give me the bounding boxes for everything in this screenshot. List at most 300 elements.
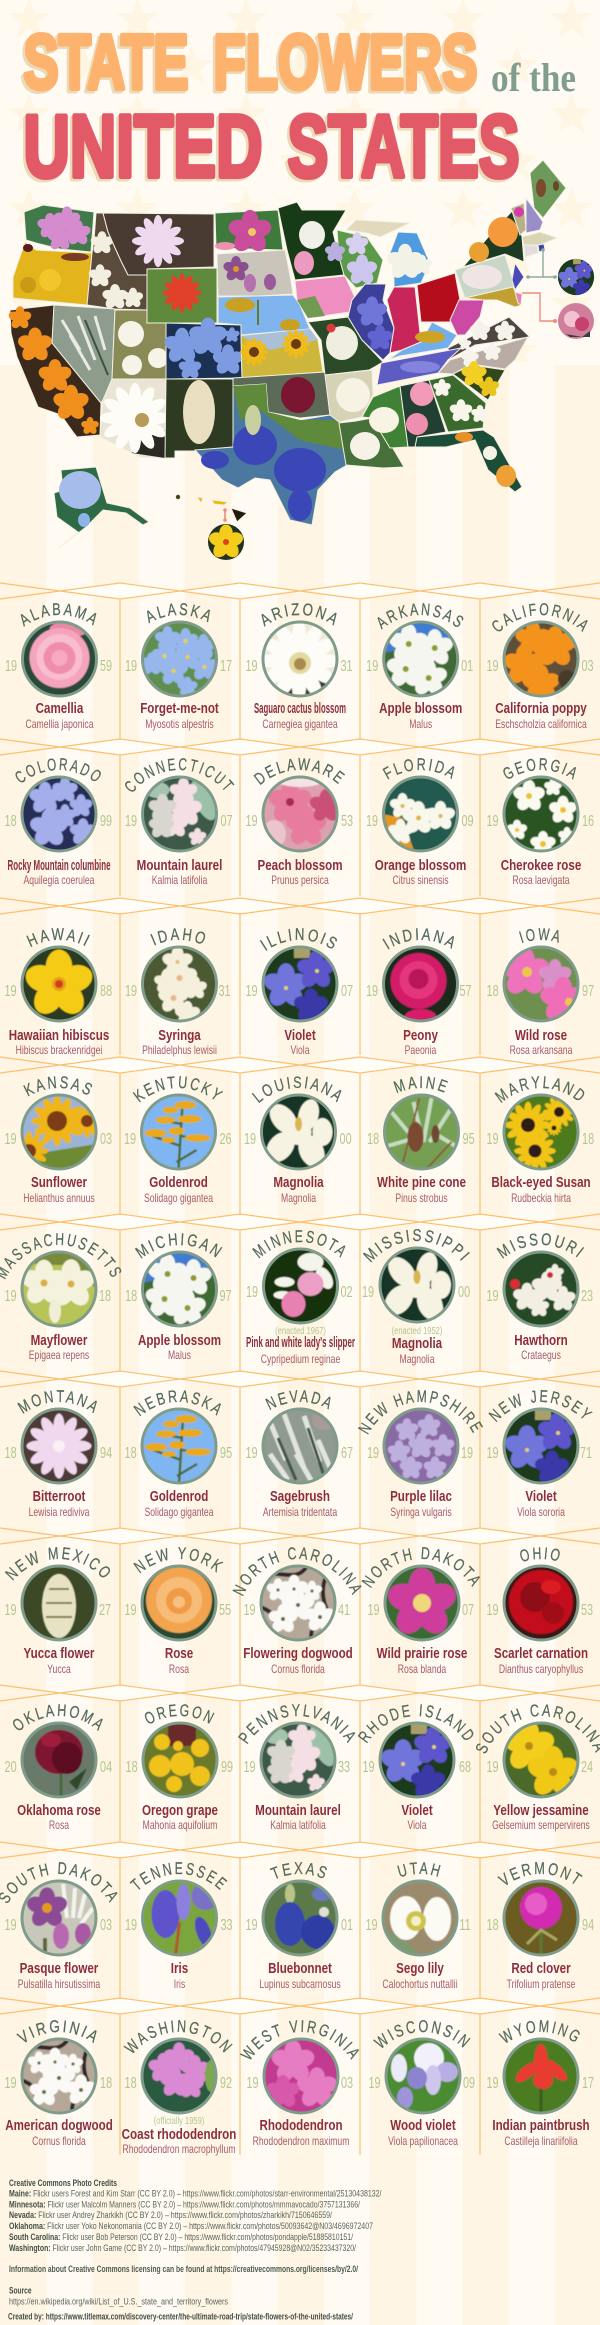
state name: COLORADO [16, 758, 101, 782]
scientific name: Viola [407, 1820, 427, 1832]
state: Florida [415, 430, 522, 492]
flower photo [503, 2038, 579, 2114]
flower name: Rhododendron [259, 2117, 343, 2133]
flower photo [262, 1408, 338, 1484]
years [486, 1444, 592, 1462]
flower photo [501, 1720, 581, 1799]
title shadow: UNITED [21, 99, 260, 198]
title line 1: STATE [24, 20, 188, 106]
years: 19 [366, 657, 378, 675]
scientific name: Solidago gigantea [144, 1507, 214, 1519]
callout: Hawaii [207, 508, 245, 560]
state name: NORTH CAROLINA [232, 1547, 362, 1596]
years: 18 [5, 1444, 17, 1462]
scientific name: Dianthus caryophyllus [499, 1664, 583, 1676]
card: Washington [122, 2020, 236, 2156]
flower name: Purple lilac [390, 1488, 452, 1504]
years: 19 [5, 657, 17, 675]
card: Mississippi [362, 1229, 470, 1366]
state: South Dakota [217, 250, 293, 296]
years [245, 1444, 353, 1462]
years: 07 [341, 982, 353, 1000]
credit lines: Nevada: Flickr user Andrey Zharkikh (CC BY 2.0) – https://www.flickr.com/photos/zharkikh/7150646559/ [9, 2210, 332, 2221]
flower photo [382, 1880, 458, 1956]
card: Vermont [487, 1862, 594, 1991]
state: Wyoming [147, 268, 217, 323]
card: New Hampshire [358, 1390, 483, 1519]
state: Texas [195, 384, 347, 525]
years [125, 2074, 232, 2092]
years: 19 [124, 1601, 137, 1619]
scientific name: Trifolium pratense [507, 1979, 576, 1991]
state: Michigan upper [346, 220, 410, 237]
years: 18 [125, 1287, 137, 1305]
flower name: Cherokee rose [501, 857, 581, 873]
card: California [486, 603, 594, 731]
years [486, 1758, 593, 1776]
years: 57 [459, 982, 472, 1000]
state: North Dakota [215, 210, 283, 255]
scientific name: Yucca [47, 1664, 71, 1676]
state name: NEW YORK [133, 1547, 224, 1574]
flower photo [506, 624, 576, 694]
flower name: Apple blossom [379, 700, 462, 716]
years: 19 [125, 1916, 137, 1934]
state name: NEVADA [265, 1390, 331, 1410]
enacted note: (enacted 1967) [275, 1325, 326, 1336]
card: Louisiana [244, 1076, 352, 1205]
enacted note: (enacted 1952) [392, 1325, 442, 1336]
credit lines: South Carolina: Flickr user Bob Peterson (CC BY 2.0) – https://www.flickr.com/photos/pondapple/51885810151/ [9, 2232, 353, 2243]
credit lines: Oklahoma: Flickr user Yoko Nekonomania (CC BY 2.0) – https://www.flickr.com/photos/50093642@N03/4696972407 [9, 2221, 373, 2232]
state name: NEW MEXICO [4, 1547, 110, 1580]
years [366, 812, 474, 830]
credit lines: Maine: Flickr users Forest and Kim Starr (CC BY 2.0) – https://www.flickr.com/photos/starr-environmental/25130438132/ [9, 2188, 382, 2200]
years [368, 2074, 475, 2092]
flower name: American dogwood [5, 2117, 113, 2133]
card: South Dakota [0, 1862, 118, 1991]
scientific name: Lupinus subcarnosus [259, 1979, 341, 1991]
years: 19 [4, 1601, 17, 1619]
flower photo [24, 948, 94, 1020]
years [5, 657, 112, 675]
flower name: Peach blossom [257, 857, 343, 873]
scientific name: Epigaea repens [29, 1350, 89, 1362]
title line 2 [24, 96, 520, 196]
years [125, 982, 231, 1000]
years: 19 [362, 1758, 375, 1776]
years: 18 [125, 1444, 137, 1462]
years [5, 1444, 112, 1462]
card: Maryland [486, 1076, 594, 1205]
flower name: Pink and white lady's slipper [246, 1335, 355, 1351]
state name: HAWAII [26, 928, 90, 947]
flower photo [21, 1565, 97, 1641]
years: 03 [100, 1916, 112, 1934]
years: 94 [582, 1916, 594, 1934]
scientific name: Helianthus annuus [23, 1193, 95, 1205]
state name: TENNESSEE [127, 1859, 232, 1895]
state: Maryland [465, 287, 522, 307]
years: 31 [340, 657, 353, 675]
years [245, 982, 353, 1000]
scientific name: Rudbeckia hirta [511, 1193, 571, 1205]
flower name: Coast rhododendron [122, 2126, 236, 2142]
flower photo [503, 1251, 579, 1327]
state name: KANSAS [23, 1076, 92, 1096]
state: Virginia [448, 317, 530, 359]
flower name: Sagebrush [270, 1488, 330, 1504]
flower photo [262, 1880, 338, 1956]
card: Alabama [5, 603, 112, 731]
years [246, 1283, 353, 1301]
callout: Rhode Island [526, 248, 595, 297]
flower name: Oregon grape [142, 1802, 218, 1818]
years [487, 1916, 594, 1934]
scientific name: Cypripedium reginae [261, 1354, 341, 1366]
card: North Dakota [361, 1547, 480, 1676]
years [4, 982, 112, 1000]
state name: INDIANA [382, 928, 454, 950]
flower name: Goldenrod [150, 1488, 208, 1504]
title shadow [21, 22, 517, 198]
scientific name: Myosotis alpestris [145, 719, 214, 731]
years: 09 [461, 812, 474, 830]
card: Connecticut [125, 758, 234, 887]
years [367, 1444, 473, 1462]
scientific name: Kalmia latifolia [152, 875, 208, 887]
years: 19 [125, 982, 137, 1000]
years: 55 [219, 1601, 231, 1619]
years: 88 [100, 982, 112, 1000]
years [487, 982, 594, 1000]
card: Arizona [245, 603, 353, 731]
years: 18 [367, 1130, 379, 1148]
state name: ILLINOIS [260, 928, 337, 951]
years: 19 [365, 1916, 378, 1934]
years: 00 [340, 1130, 352, 1148]
state: Tennessee [377, 348, 461, 385]
state: West Virginia [450, 300, 484, 335]
state: Washington [24, 205, 94, 252]
flower name: Magnolia [273, 1174, 324, 1190]
state name: VIRGINIA [15, 2017, 103, 2048]
scientific name: Solidago gigantea [144, 1193, 213, 1205]
years [243, 1601, 350, 1619]
card: Nebraska [125, 1390, 232, 1519]
flower name: Scarlet carnation [494, 1645, 588, 1661]
years: 33 [338, 1758, 350, 1776]
flower photo [19, 1251, 97, 1327]
years [124, 1130, 232, 1148]
years [125, 1444, 232, 1462]
state: Mississippi [362, 386, 408, 448]
title line 2: UNITED [24, 96, 262, 196]
card: Delaware [245, 758, 353, 887]
card: Florida [366, 758, 474, 887]
flower photo [385, 948, 456, 1020]
flower photo [506, 948, 576, 1020]
scientific name: Pinus strobus [395, 1193, 448, 1205]
flower photo [385, 778, 456, 850]
flower name: Wild rose [515, 1027, 567, 1043]
flower photo [24, 778, 94, 850]
years: 19 [124, 1130, 136, 1148]
card: Utah [365, 1862, 471, 1991]
state: Arkansas [325, 370, 373, 422]
flower photo [24, 1096, 94, 1168]
card: Oregon [126, 1704, 233, 1832]
years: 18 [125, 2074, 137, 2092]
years: 19 [245, 657, 258, 675]
state: Illinois [348, 284, 394, 360]
state name: NEW HAMPSHIRE [358, 1390, 483, 1434]
flower name: Apple blossom [138, 1332, 221, 1348]
state name: NORTH DAKOTA [361, 1547, 480, 1588]
card: Ohio [486, 1547, 593, 1676]
flower name: Wild prairie rose [377, 1645, 467, 1661]
years [365, 1916, 471, 1934]
state: Oklahoma [233, 372, 330, 418]
years: 59 [100, 657, 112, 675]
card: Virginia [4, 2020, 113, 2148]
map of the United States [7, 160, 595, 560]
years [124, 1601, 231, 1619]
flower name: Violet [284, 1027, 316, 1043]
years: 20 [5, 1758, 17, 1776]
flower name: Magnolia [392, 1335, 443, 1351]
years: 16 [582, 812, 594, 830]
scientific name: Pulsatilla hirsutissima [18, 1979, 100, 1991]
years [486, 812, 594, 830]
years [4, 1287, 111, 1305]
scientific name: Carnegiea gigantea [262, 719, 338, 731]
years: 19 [486, 1758, 499, 1776]
scientific name: Malus [168, 1350, 191, 1362]
state: New Mexico [165, 379, 233, 458]
source url: https://en.wikipedia.org/wiki/List_of_U.S._state_and_territory_flowers [9, 2297, 228, 2308]
flower name: Hawaiian hibiscus [9, 1027, 109, 1043]
flower name: Forget-me-not [140, 700, 219, 716]
years: 04 [100, 1758, 112, 1776]
state name: TEXAS [268, 1859, 332, 1884]
years: 68 [459, 1758, 471, 1776]
years: 19 [368, 2074, 381, 2092]
state: Alabama [400, 380, 446, 447]
card: Kentucky [124, 1076, 232, 1205]
years: 18 [5, 812, 17, 830]
state: Oregon [13, 242, 92, 305]
years: 19 [245, 1444, 258, 1462]
years: 02 [340, 1283, 353, 1301]
years: 71 [580, 1444, 592, 1462]
scientific name: Lewisia rediviva [29, 1507, 90, 1519]
years [125, 657, 232, 675]
card: South Carolina [476, 1704, 600, 1832]
credits heading: Creative Commons Photo Credits [9, 2178, 117, 2189]
state: Nevada [52, 305, 115, 403]
flower photo [141, 2038, 217, 2114]
years [486, 2074, 594, 2092]
scientific name: Rosa blanda [398, 1664, 446, 1676]
state: Delaware [515, 292, 522, 305]
flower name: Iris [171, 1960, 188, 1976]
years: 19 [4, 982, 17, 1000]
source heading: Source [9, 2286, 32, 2297]
flower photo [141, 1408, 217, 1484]
years: 18 [100, 2074, 112, 2092]
card: Idaho [125, 928, 231, 1057]
years: 31 [218, 982, 231, 1000]
years: 00 [458, 1283, 470, 1301]
state: Rhode Island [538, 244, 545, 252]
state: New York [463, 208, 524, 267]
state name: MINNESOTA [252, 1230, 346, 1258]
flower photo [264, 624, 336, 694]
scientific name: Crataegus [521, 1350, 561, 1362]
years: 19 [243, 1601, 256, 1619]
years: 18 [487, 982, 499, 1000]
years: 33 [220, 1916, 233, 1934]
years: 19 [246, 1283, 258, 1301]
flower photo [144, 948, 215, 1020]
years [245, 1916, 353, 1934]
state: South Carolina [453, 361, 505, 400]
card: Georgia [486, 758, 594, 887]
state name: WEST VIRGINIA [237, 2017, 365, 2064]
flower photo [264, 948, 336, 1020]
state name: NEBRASKA [133, 1390, 221, 1416]
years: 11 [459, 1916, 471, 1934]
state name: NEW JERSEY [488, 1390, 593, 1422]
state: Arizona [100, 379, 170, 458]
state name: MISSOURI [496, 1233, 584, 1258]
card: Indiana [366, 928, 472, 1057]
scientific name: Viola sororia [517, 1507, 565, 1519]
years: 41 [338, 1601, 350, 1619]
title line 1 [24, 20, 478, 106]
footer credits [8, 2178, 382, 2322]
years: 19 [4, 1287, 17, 1305]
scientific name: Camellia japonica [25, 719, 94, 731]
flower name: Mayflower [31, 1332, 87, 1348]
scientific name: Philadelphus lewisii [142, 1045, 217, 1057]
state name: ARKANSAS [378, 603, 464, 630]
card: Michigan [125, 1233, 232, 1362]
years [5, 1758, 112, 1776]
flower photo [143, 1096, 214, 1168]
card: New Mexico [4, 1547, 111, 1676]
flower photo [503, 1880, 579, 1956]
years [245, 657, 353, 675]
years: 17 [582, 2074, 594, 2092]
grid of diamond bands and dividers [0, 583, 600, 2155]
years: 99 [221, 1758, 233, 1776]
scientific name: Rosa [169, 1664, 189, 1676]
years [125, 1916, 233, 1934]
scientific name: Rosa [49, 1820, 69, 1832]
flower photo [503, 1408, 579, 1486]
years: 07 [220, 812, 233, 830]
state: California [7, 305, 101, 437]
scientific name: Aquilegia coerulea [24, 875, 95, 887]
card: Texas [245, 1862, 353, 1991]
years: 99 [100, 812, 112, 830]
card: Massachusetts [0, 1233, 122, 1362]
state name: UTAH [396, 1859, 444, 1881]
title shadow: STATE [21, 22, 186, 108]
scientific name: Kalmia latifolia [270, 1820, 326, 1832]
scientific name: Artemisia tridentata [263, 1507, 337, 1519]
flower photo [142, 1251, 218, 1328]
flower name: Bitterroot [33, 1488, 86, 1504]
card: Illinois [245, 928, 353, 1057]
flower name: Violet [401, 1802, 433, 1818]
flower name: Wood violet [390, 2117, 456, 2133]
years [245, 812, 353, 830]
years: 19 [245, 982, 258, 1000]
state name: OREGON [144, 1704, 214, 1724]
years [367, 1601, 474, 1619]
flower name: Bluebonnet [268, 1960, 332, 1976]
scientific name: Mahonia aquifolium [143, 1820, 217, 1832]
card: Oklahoma [5, 1704, 112, 1832]
flower photo [260, 1565, 337, 1641]
state: Louisiana [339, 418, 404, 468]
card: Kansas [4, 1076, 112, 1205]
years: 19 [367, 1444, 379, 1462]
card: Maine [367, 1076, 475, 1205]
state: Vermont [511, 203, 526, 235]
years: 03 [581, 657, 594, 675]
state name: MISSISSIPPI [362, 1229, 470, 1262]
title [21, 20, 576, 198]
credit lines: Minnesota: Flickr user Malcolm Manners (CC BY 2.0) – https://www.flickr.com/photos/mmmavocado/3757131366/ [9, 2200, 360, 2210]
card: Tennessee [125, 1862, 233, 1991]
state: Minnesota [278, 202, 346, 280]
years: 01 [341, 1916, 353, 1934]
flower name: Violet [525, 1488, 557, 1504]
state name: VERMONT [496, 1859, 587, 1890]
state: New Jersey [512, 263, 524, 290]
years [486, 657, 594, 675]
years: 26 [219, 1130, 232, 1148]
scientific name: Magnolia [281, 1193, 316, 1205]
flower photo [385, 624, 456, 694]
years: 95 [463, 1130, 475, 1148]
state name: OKLAHOMA [12, 1704, 103, 1731]
flower photo [260, 1722, 339, 1798]
years: 19 [4, 1130, 17, 1148]
scientific name: Rosa arkansana [510, 1045, 573, 1057]
years: 19 [245, 812, 258, 830]
state: Kansas [240, 329, 323, 378]
years: 92 [220, 2074, 232, 2092]
years: 19 [246, 2074, 259, 2092]
state name: FLORIDA [382, 758, 454, 780]
years: 07 [462, 1601, 474, 1619]
state: Alaska [54, 467, 149, 548]
state: New Hampshire [526, 198, 543, 233]
flower photo [503, 1094, 579, 1172]
state: Iowa [295, 276, 357, 318]
card: Rhode Island [358, 1704, 474, 1832]
flower name: Syringa [158, 1027, 201, 1043]
flower name: Red clover [511, 1960, 571, 1976]
state name: CALIFORNIA [492, 603, 588, 632]
years: 19 [4, 1916, 17, 1934]
years: 19 [367, 1601, 380, 1619]
